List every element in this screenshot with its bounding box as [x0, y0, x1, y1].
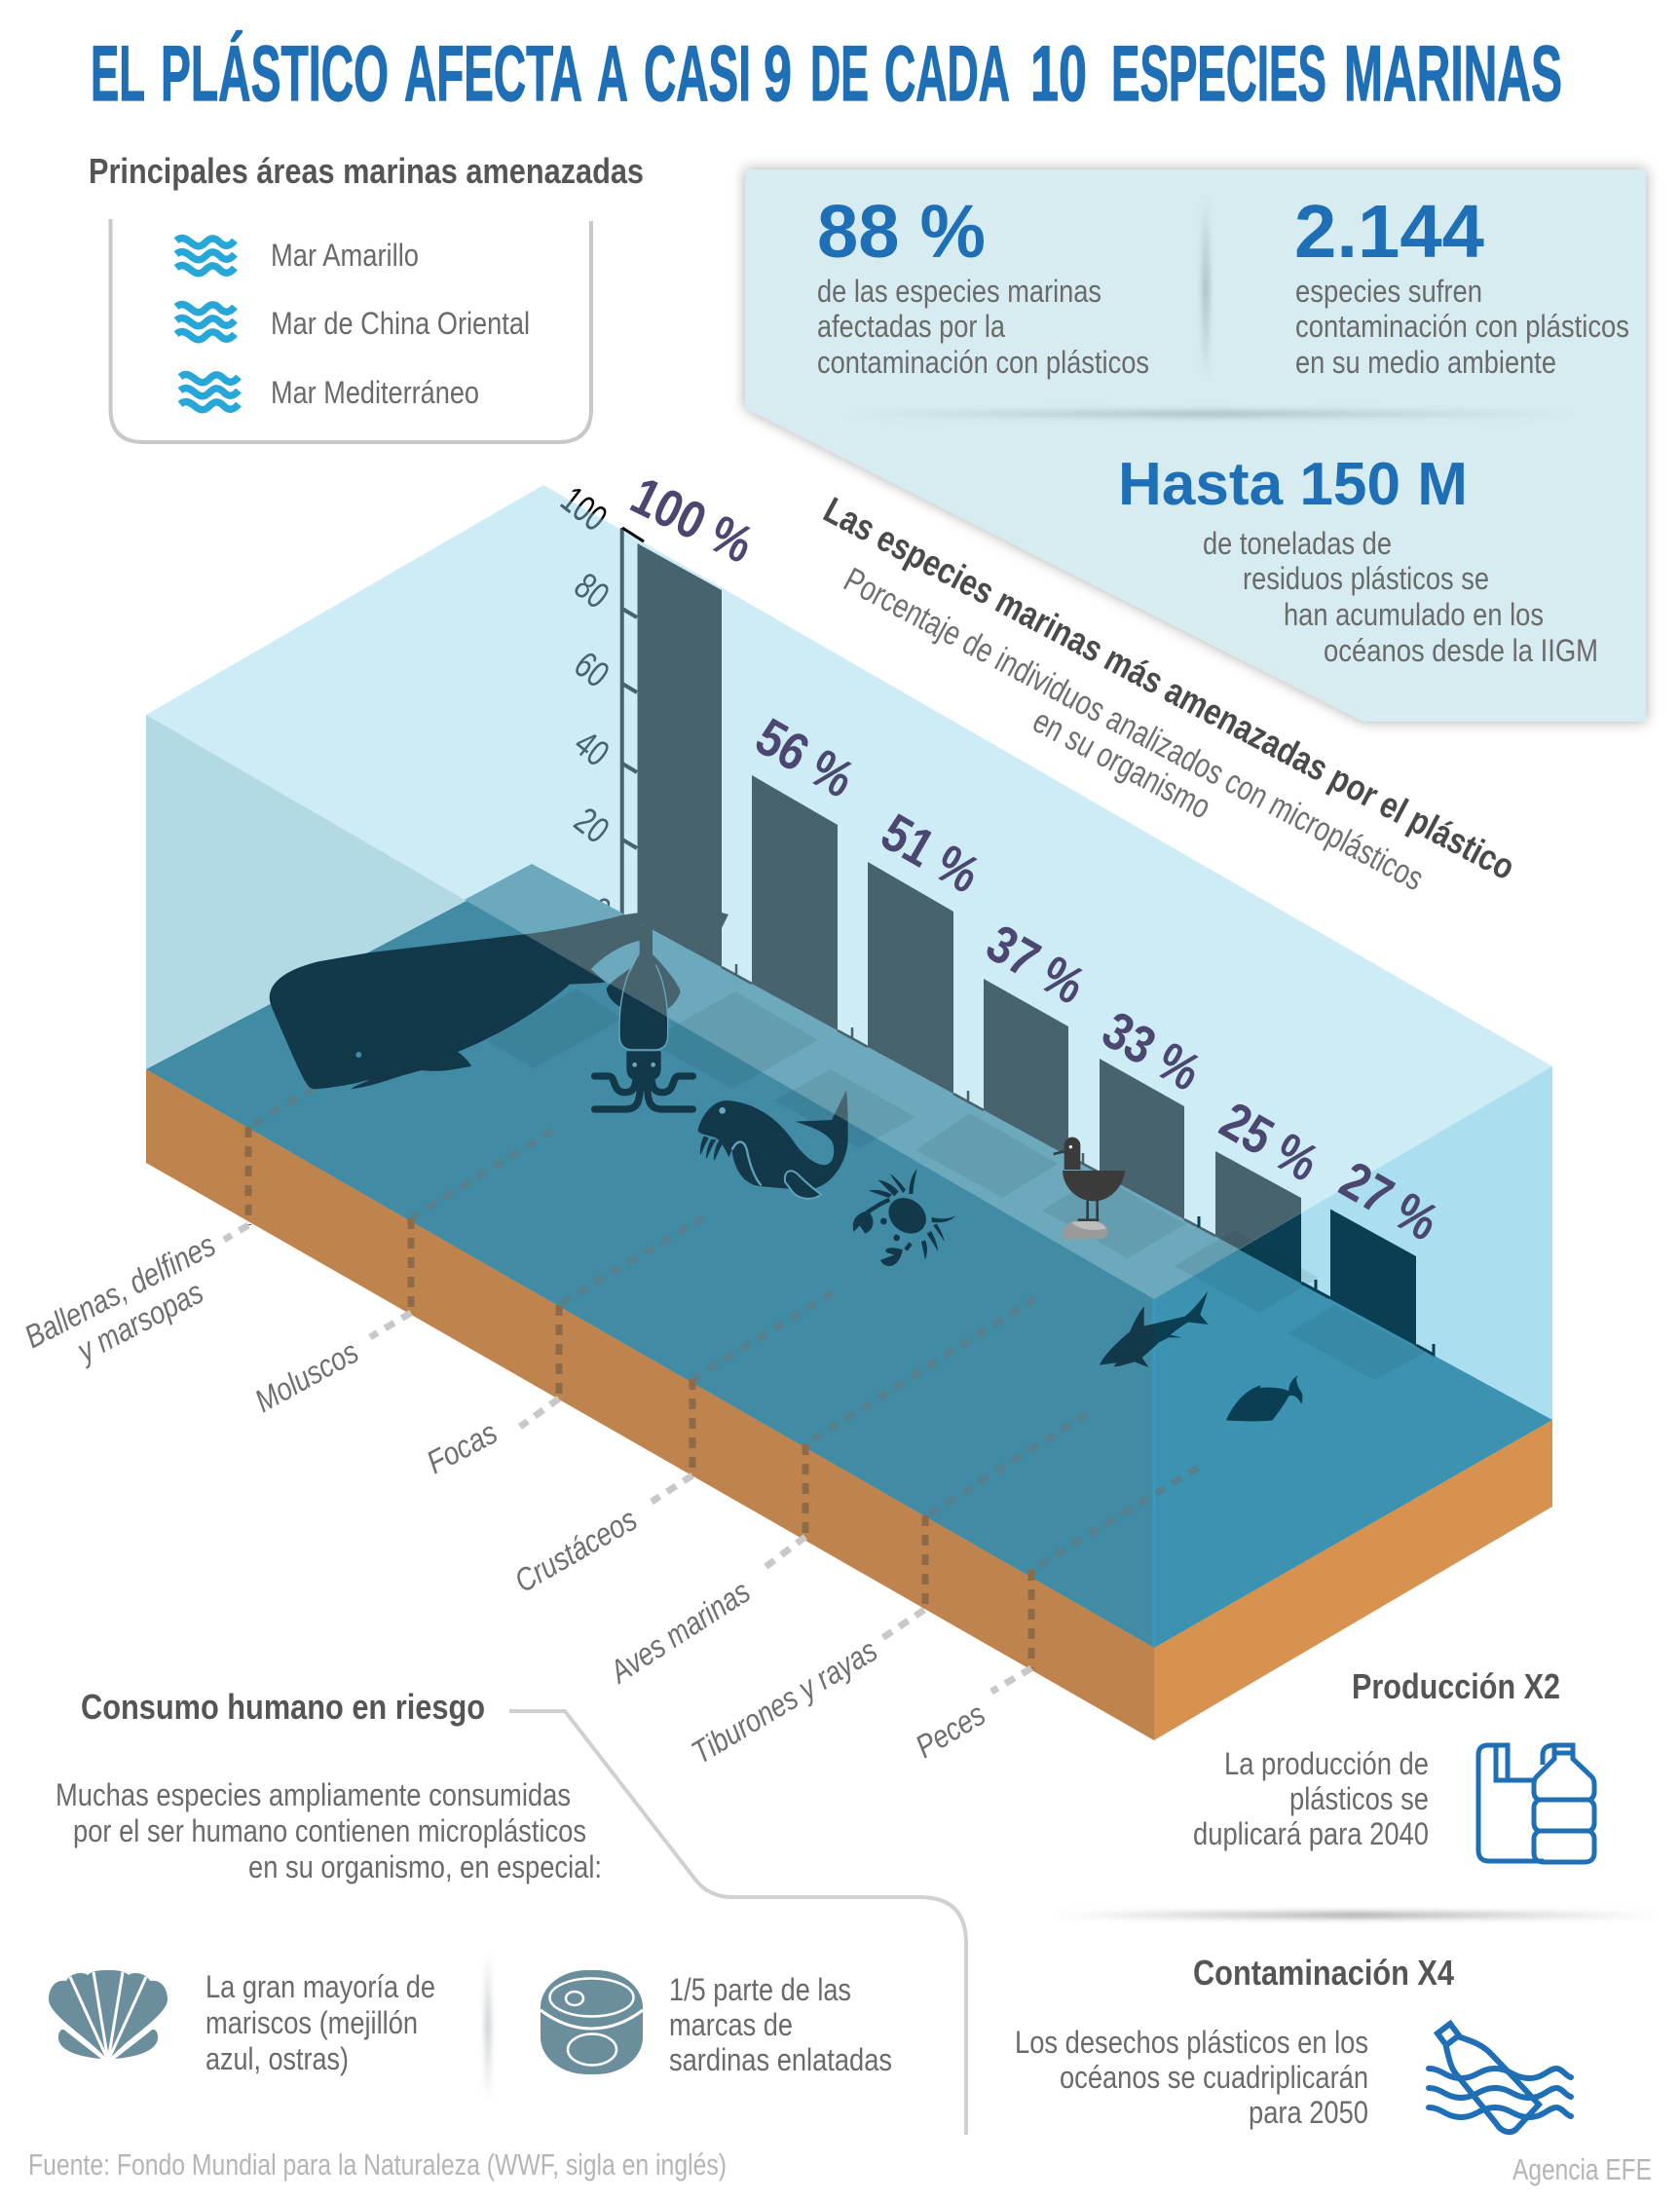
panel: key figures [745, 169, 1646, 722]
bar baseline ticks [722, 964, 1215, 1236]
title: A [597, 30, 628, 118]
panel: producción X2 [1193, 1666, 1594, 1862]
species labels: Crustáceos [508, 1501, 643, 1599]
stat text 1: de las especies marinas [817, 274, 1101, 309]
panel: principales áreas marinas amenazadas [89, 151, 644, 442]
leader lines outside [224, 1225, 1031, 1692]
stat text 3: de toneladas de [1203, 526, 1392, 561]
legend frame [111, 219, 591, 442]
can text: sardinas enlatadas [669, 2042, 892, 2077]
vertical divider shadow [1202, 196, 1210, 381]
dotted leader lines [224, 1089, 1198, 1692]
species labels: Moluscos [248, 1333, 364, 1419]
stat text 1 [817, 274, 1149, 380]
shell text [205, 1969, 435, 2076]
leader lines on water [248, 1089, 1198, 1570]
bar chart axis: 40 [567, 723, 616, 775]
species labels: Aves marinas [602, 1573, 757, 1691]
stat text 2 [1295, 274, 1629, 380]
title: 10 [1030, 30, 1087, 118]
title: DE [810, 30, 869, 118]
isometric ocean block with bar chart [146, 479, 1552, 1648]
label: Mar Amarillo: Mar Amarillo [271, 238, 419, 273]
text: producción [1193, 1746, 1429, 1851]
connector line [509, 1711, 966, 2135]
stat text 2: en su medio ambiente [1295, 345, 1556, 380]
text: producción: La producción de [1224, 1746, 1429, 1781]
icon: squid [595, 925, 692, 1109]
chart heading rotated: Porcentaje de individuos analizados con microplásticos [838, 561, 1430, 899]
species labels: Tiburones y rayas [685, 1631, 883, 1771]
text: contaminación: para 2050 [1249, 2095, 1368, 2130]
percentage labels: 27 % [1330, 1149, 1449, 1252]
bar chart axis: 100 [553, 479, 614, 540]
species labels: Focas [421, 1413, 504, 1480]
percentage labels: 33 % [1093, 999, 1212, 1102]
stat text 1: afectadas por la [817, 309, 1005, 344]
divider between projections [1055, 1912, 1659, 1919]
label: Mar Mediterráneo: Mar Mediterráneo [271, 375, 479, 410]
title: 9 [764, 30, 792, 118]
front-right water face [1239, 1066, 1552, 1420]
intro text: Muchas especies ampliamente consumidas [56, 1777, 571, 1812]
bar chart axis: 100 [553, 479, 614, 540]
horizontal divider shadow [843, 410, 1578, 418]
text: contaminación: Los desechos plásticos en los [1015, 2025, 1368, 2060]
icon: seabird on rock [1054, 1137, 1125, 1239]
icon: sardine can [541, 1970, 643, 2074]
stat: 88 %: 88 % [817, 190, 986, 274]
icon: shark [1100, 1291, 1209, 1367]
stat text 1: contaminación con plásticos [817, 345, 1149, 380]
percentage labels: 37 % [977, 913, 1096, 1016]
title: PLÁSTICO [161, 30, 389, 118]
percentage labels [622, 465, 1449, 1252]
source: Fuente: Fondo Mundial para la Naturaleza (WWF, sigla en inglés) [28, 2147, 727, 2181]
species labels: Peces [909, 1696, 991, 1765]
bar chart axis: 80 [567, 565, 616, 617]
bar chart axis: 60 [567, 644, 616, 696]
percentage labels: 56 % [746, 706, 865, 809]
title: AFECTA [404, 30, 582, 118]
stat text 2: contaminación con plásticos [1295, 309, 1629, 344]
stat: 2.144: 2.144 [1294, 190, 1484, 274]
orange ground: left side [146, 1069, 1154, 1740]
intro text: por el ser humano contienen microplásticos [73, 1813, 586, 1848]
title: CADA [884, 30, 1010, 118]
icon: bag and bottle [1478, 1745, 1594, 1862]
stat text 2: especies sufren [1295, 274, 1482, 309]
front-left water face [146, 715, 467, 1069]
stat text 3 [1203, 526, 1598, 668]
text: contaminación [1015, 2025, 1368, 2130]
can text: marcas de [669, 2007, 793, 2042]
title: CASI [644, 30, 751, 118]
bars [637, 543, 1301, 1290]
chart heading rotated: en su organismo [1027, 702, 1216, 827]
shell text: La gran mayoría de [205, 1969, 435, 2004]
species labels: y marsopas [69, 1273, 209, 1369]
intro text [56, 1777, 602, 1884]
percentage labels: 51 % [872, 802, 990, 905]
icon: bottle in waves [1429, 2024, 1571, 2132]
shell text: mariscos (mejillón [205, 2005, 418, 2040]
species labels [19, 1226, 991, 1771]
bars seen through right face [1215, 1210, 1416, 1346]
panel: contaminación X4 [1015, 1953, 1571, 2132]
species labels: Ballenas, delfines [19, 1226, 221, 1355]
icon: fish [1226, 1375, 1302, 1421]
icon: crab [853, 1169, 956, 1266]
divider [485, 1951, 491, 2102]
title: EL [91, 30, 145, 118]
title: ESPECIES [1111, 30, 1326, 118]
stat: Hasta 150 M: Hasta 150 M [1118, 451, 1468, 518]
icon: waves 1 [176, 239, 235, 274]
bar chart axis [560, 489, 645, 914]
front vertical edge [1153, 1299, 1155, 1648]
sea floor [146, 864, 1552, 1648]
heading: consumo humano: Consumo humano en riesgo [81, 1687, 485, 1727]
stat text 3: océanos desde la IIGM [1324, 633, 1598, 668]
intro text: en su organismo, en especial: [248, 1849, 602, 1884]
title [91, 30, 1562, 118]
water back volume [146, 485, 1552, 1648]
front-right floor through water [1154, 1249, 1552, 1648]
chart heading rotated: Las especies marinas más amenazadas por el plástico [817, 489, 1521, 888]
heading: contaminación: Contaminación X4 [1193, 1953, 1454, 1993]
icon: waves 3 [180, 375, 239, 410]
panel background [745, 169, 1646, 722]
heading: áreas marinas: Principales áreas marinas amenazadas [89, 151, 644, 191]
label: Mar de China Oriental: Mar de China Oriental [271, 306, 530, 341]
bar baseline ticks dark [1199, 1216, 1434, 1355]
orange ground: right side [1154, 1420, 1552, 1740]
can text: 1/5 parte de las [669, 1972, 851, 2007]
heading: producción: Producción X2 [1352, 1666, 1560, 1706]
leader lines on ground [248, 1127, 1031, 1668]
text: producción: duplicará para 2040 [1193, 1816, 1429, 1851]
bar shadows on floor [487, 988, 1425, 1380]
shell text: azul, ostras) [205, 2041, 349, 2076]
stat text 3: residuos plásticos se [1243, 561, 1489, 596]
icon: waves 2 [176, 305, 235, 340]
icon: shell [49, 1970, 168, 2061]
percentage labels: 25 % [1211, 1090, 1329, 1193]
front-left floor through water [146, 901, 1154, 1648]
icon: seal [698, 1090, 848, 1199]
text: contaminación: océanos se cuadriplicarán [1060, 2060, 1368, 2095]
icon: whale [270, 913, 728, 1089]
panel: consumo humano en riesgo [49, 1687, 966, 2135]
percentage labels: 100 % [622, 465, 763, 575]
stat text 3: han acumulado en los [1284, 597, 1544, 632]
bar chart axis: 20 [567, 800, 616, 852]
bar chart axis: 0 [580, 889, 618, 932]
can text [669, 1972, 892, 2077]
text: producción: plásticos se [1289, 1781, 1429, 1816]
